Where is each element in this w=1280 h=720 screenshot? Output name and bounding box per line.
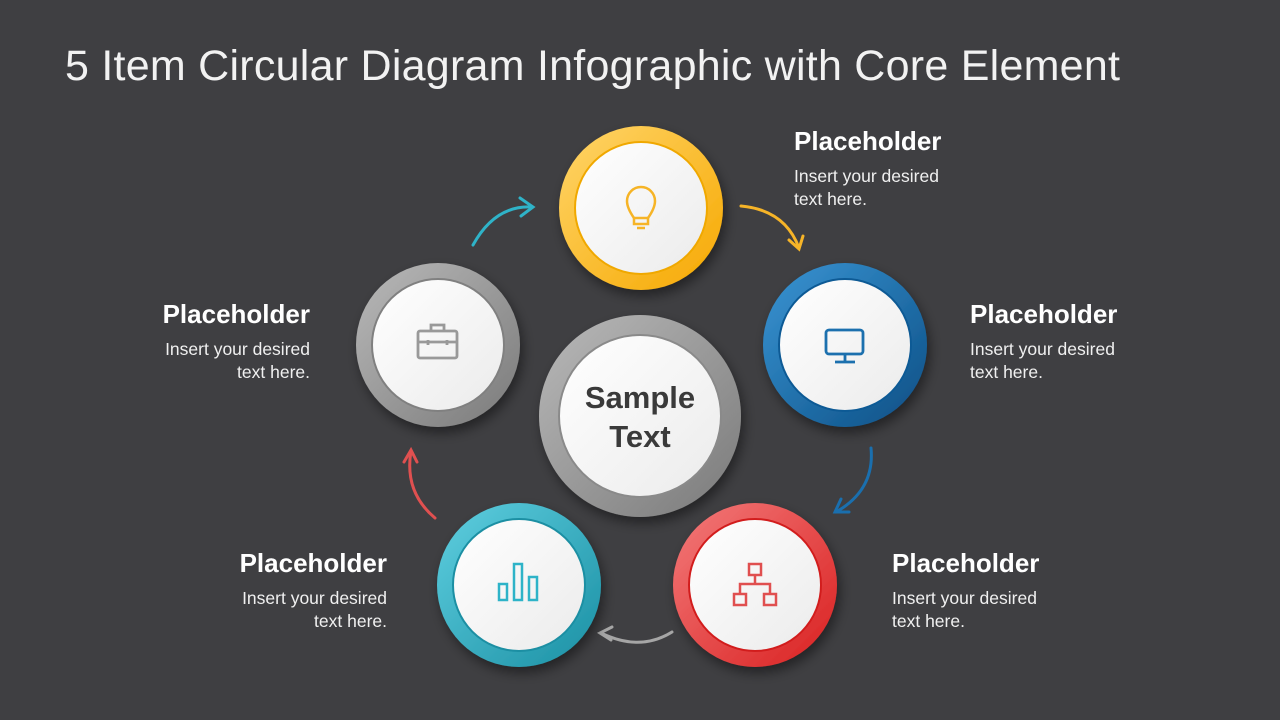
arrow: yellow [741, 206, 803, 249]
core text: Sample [585, 380, 695, 415]
circle: red (hierarchy) [673, 503, 837, 667]
icon: briefcase [418, 325, 457, 358]
text: top right: Insert your desired [794, 166, 939, 186]
text: bottom left [240, 548, 387, 631]
circle: yellow (idea) [559, 126, 723, 290]
circle: blue (monitor) [763, 263, 927, 427]
arrow: teal [473, 198, 533, 245]
text: top right: Placeholder [794, 126, 941, 156]
arrow: red [404, 450, 435, 518]
text: bottom right: Insert your desired [892, 588, 1037, 608]
circle: teal (chart) [437, 503, 601, 667]
text: bottom right: Placeholder [892, 548, 1039, 578]
text: bottom left: text here. [314, 611, 387, 631]
core text: Text [609, 419, 671, 454]
text: right: Placeholder [970, 299, 1117, 329]
core text [585, 380, 695, 454]
text: bottom right: text here. [892, 611, 965, 631]
text: right [970, 299, 1117, 382]
text: right: text here. [970, 362, 1043, 382]
icon: monitor [826, 330, 863, 362]
text: bottom left: Insert your desired [242, 588, 387, 608]
text: right: Insert your desired [970, 339, 1115, 359]
text: top right: text here. [794, 189, 867, 209]
icon: hierarchy [734, 564, 776, 605]
icon: bar chart [499, 564, 537, 600]
text: left: text here. [237, 362, 310, 382]
title: 5 Item Circular Diagram Infographic with Core Element [65, 42, 1120, 90]
text: top right [794, 126, 941, 209]
text: bottom right [892, 548, 1039, 631]
text: left [163, 299, 310, 382]
text: left: Insert your desired [165, 339, 310, 359]
arrow: blue [835, 448, 871, 512]
circle: core [539, 315, 741, 517]
text: bottom left: Placeholder [240, 548, 387, 578]
icon: lightbulb [627, 187, 655, 228]
text: left: Placeholder [163, 299, 310, 329]
circle: gray (briefcase) [356, 263, 520, 427]
arrow: gray [600, 627, 672, 642]
